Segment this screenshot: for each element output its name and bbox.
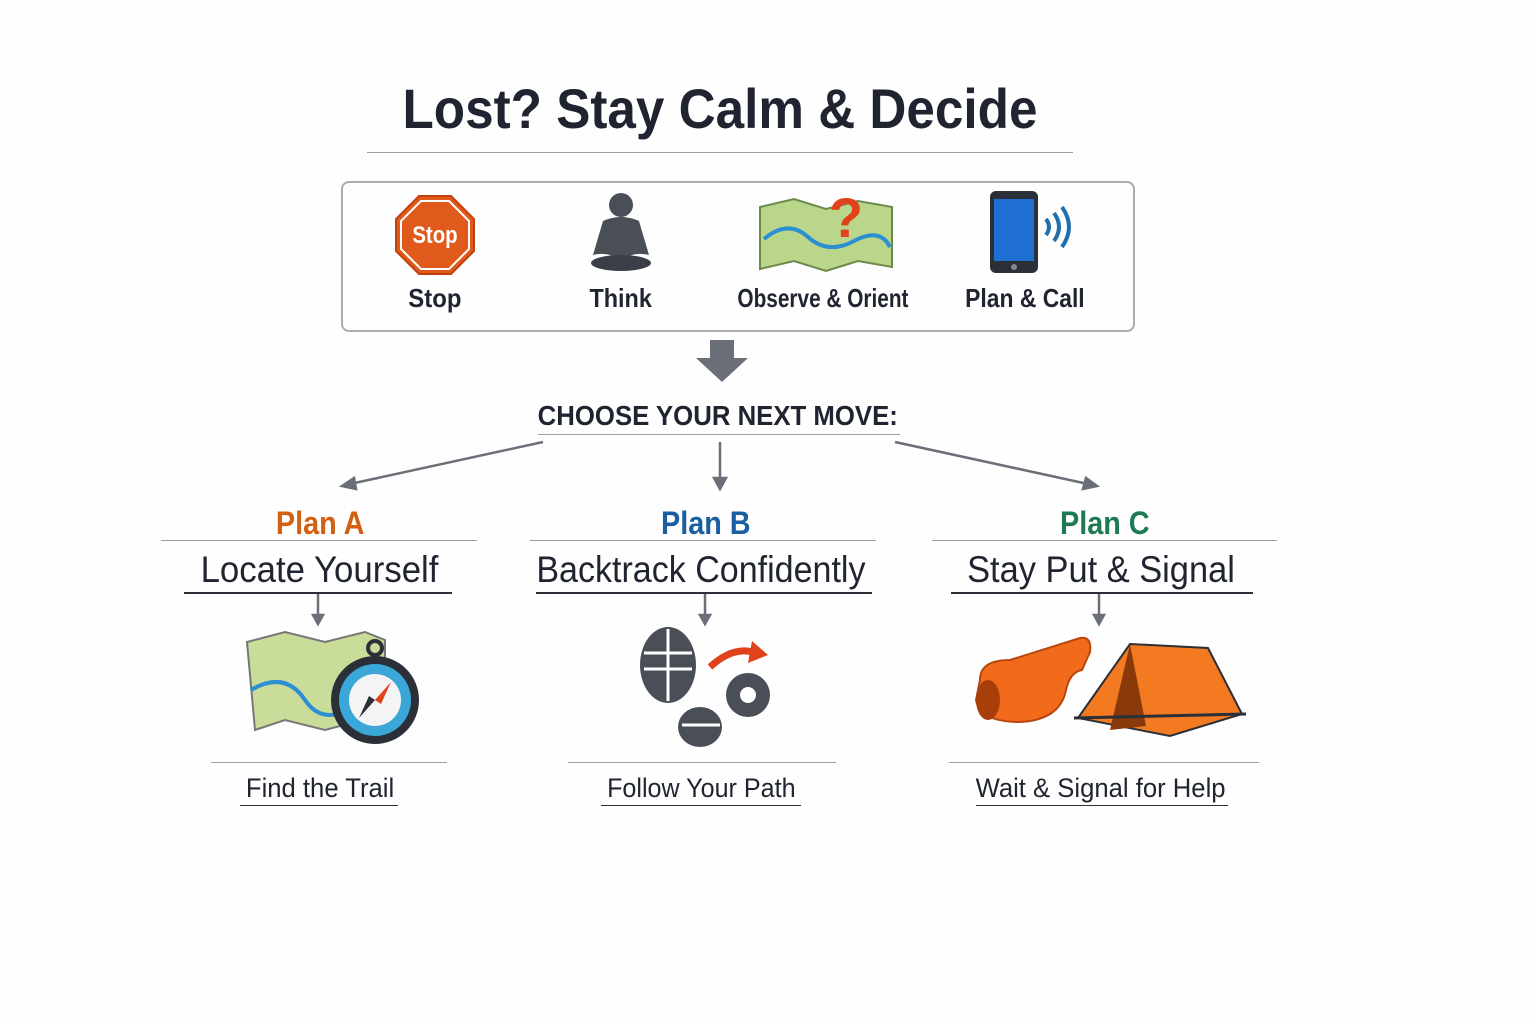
heading: Plan B: Plan B	[661, 505, 751, 541]
subheading: Stay Put & Signal: Stay Put & Signal	[967, 549, 1235, 590]
panel: STOP steps	[341, 181, 1135, 332]
icon: phone	[990, 191, 1071, 273]
icon: stop sign: Stop	[412, 221, 458, 248]
label: Stop: Stop	[408, 283, 462, 313]
heading: Plan C: Plan C	[1060, 505, 1149, 541]
heading: Plan A: Plan A	[276, 505, 364, 541]
arrow: down	[696, 340, 748, 382]
label: Observe & Orient: Observe & Orient	[737, 283, 908, 313]
icon: footprints with arrow	[640, 627, 770, 747]
label: Plan & Call: Plan & Call	[965, 283, 1085, 313]
subheading: Backtrack Confidently: Backtrack Confidently	[536, 549, 866, 590]
panel: Plan B	[530, 505, 876, 806]
label: Think: Think	[590, 283, 652, 313]
panel: Plan A	[161, 505, 477, 806]
caption: Follow Your Path: Follow Your Path	[607, 773, 795, 803]
icon: map with question mark	[759, 189, 893, 272]
icon: map and compass	[246, 631, 419, 744]
caption: Wait & Signal for Help: Wait & Signal for Help	[976, 773, 1226, 803]
heading: choose your next move: CHOOSE YOUR NEXT MOVE:	[538, 400, 898, 431]
subheading: Locate Yourself: Locate Yourself	[201, 549, 439, 590]
icon: stop sign	[395, 195, 475, 275]
title: Lost? Stay Calm & Decide	[403, 77, 1037, 140]
icon: person thinking	[591, 193, 651, 271]
panel: Plan C	[932, 505, 1277, 806]
icon: whistle and tent	[975, 636, 1246, 737]
caption: Find the Trail: Find the Trail	[246, 773, 394, 803]
